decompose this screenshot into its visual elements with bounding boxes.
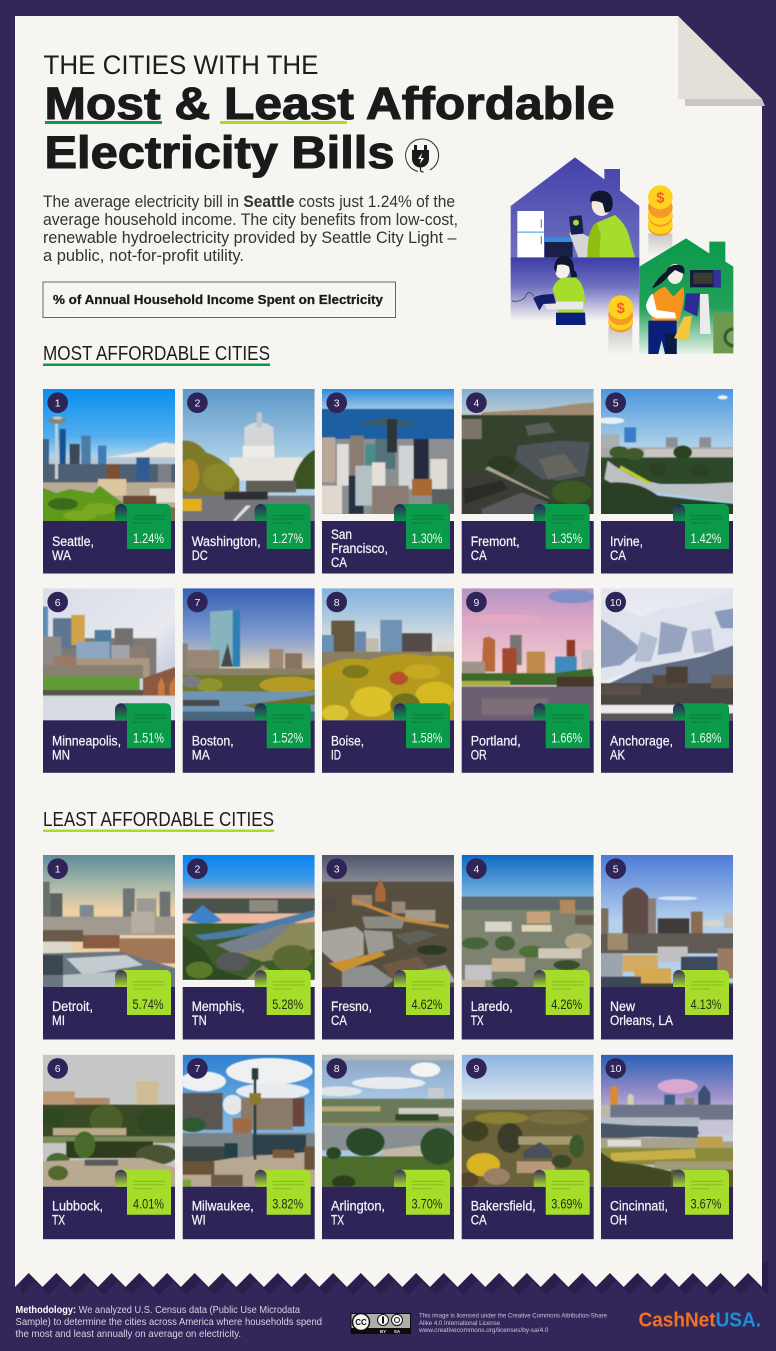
card: Laredo bbox=[460, 855, 595, 1040]
city panel bbox=[43, 987, 175, 1040]
city name: Detroit, bbox=[52, 999, 93, 1014]
methodology note: Sample) to determine the cities across America where households spend bbox=[16, 1316, 322, 1328]
percent tag bbox=[255, 970, 311, 1015]
percent tag bbox=[673, 1170, 729, 1215]
rank badge bbox=[326, 1058, 347, 1079]
rank badge: 8 bbox=[334, 1063, 340, 1075]
city panel bbox=[462, 1187, 594, 1239]
rank badge: 7 bbox=[194, 597, 200, 609]
city name: New bbox=[610, 999, 635, 1014]
paper torn edge shadow bbox=[21, 1262, 768, 1295]
card: Milwaukee bbox=[179, 1055, 316, 1239]
percent tag: 1.58% bbox=[412, 729, 442, 745]
rank badge: 5 bbox=[613, 398, 619, 410]
city name: Orleans, LA bbox=[610, 1013, 673, 1028]
rank badge: 7 bbox=[194, 1063, 200, 1075]
rank badge: 8 bbox=[334, 597, 340, 609]
percent tag: 3.67% bbox=[690, 1196, 722, 1212]
percent tag: 3.82% bbox=[272, 1196, 303, 1212]
title: Most & Least Affordable bbox=[44, 78, 614, 129]
percent tag: 4.01% bbox=[133, 1196, 164, 1212]
card: Fremont bbox=[460, 389, 595, 574]
city name: Irvine, bbox=[610, 534, 643, 549]
percent tag: 1.68% bbox=[690, 729, 722, 745]
photo: Anchorage bbox=[601, 588, 733, 720]
rank badge bbox=[466, 858, 487, 879]
city panel bbox=[462, 521, 594, 574]
illustration: households paying electricity bills: $ bbox=[617, 301, 625, 317]
city panel bbox=[322, 1187, 454, 1239]
photo: Fremont bbox=[462, 389, 594, 514]
city name: Bakersfield, bbox=[471, 1199, 536, 1214]
percent tag bbox=[534, 1170, 590, 1215]
card: Detroit bbox=[41, 855, 176, 1040]
intro text: renewable hydroelectricity provided by Seattle City Light – bbox=[43, 229, 457, 247]
city name: ID bbox=[331, 747, 341, 762]
city name: OH bbox=[610, 1213, 627, 1228]
city name: Memphis, bbox=[192, 999, 245, 1014]
rank badge bbox=[466, 1058, 487, 1079]
creative commons badge bbox=[350, 1313, 411, 1334]
city name: CA bbox=[471, 548, 487, 563]
rank badge: 5 bbox=[613, 864, 619, 876]
rank badge bbox=[47, 858, 68, 879]
card: Arlington bbox=[315, 1053, 457, 1239]
percent tag bbox=[115, 504, 171, 549]
card: Irvine bbox=[598, 389, 734, 574]
rank badge: 1 bbox=[55, 398, 61, 410]
city name: Fremont, bbox=[471, 534, 520, 549]
intro text: The average electricity bill in Seattle costs just 1.24% of the bbox=[43, 193, 455, 211]
city name: TN bbox=[192, 1013, 207, 1028]
rank badge bbox=[605, 592, 626, 612]
card: Anchorage bbox=[599, 588, 734, 773]
intro text: a public, not-for-profit utility. bbox=[43, 247, 244, 265]
card: Memphis bbox=[181, 855, 316, 1040]
card: Fresno bbox=[320, 855, 455, 1040]
photo: Cincinnati bbox=[601, 1054, 733, 1187]
license text bbox=[418, 1314, 608, 1334]
city name: Arlington, bbox=[331, 1199, 385, 1214]
city panel bbox=[43, 1187, 175, 1239]
city panel bbox=[322, 987, 454, 1040]
city name: Milwaukee, bbox=[192, 1199, 254, 1214]
city name: CA bbox=[331, 1013, 347, 1028]
metric label box: % of Annual Household Income Spent on Electricity bbox=[53, 293, 383, 307]
rank badge bbox=[466, 592, 487, 612]
city name: CA bbox=[610, 548, 626, 563]
city name: Minneapolis, bbox=[52, 733, 121, 748]
rank badge: 4 bbox=[473, 398, 479, 410]
card: New Orleans bbox=[599, 855, 734, 1040]
illustration: households paying electricity bills: $ bbox=[656, 191, 664, 207]
license text: This image is licensed under the Creative Commons Attribution-Share bbox=[419, 1314, 608, 1320]
license text: www.creativecommons.org/licenses/by-sa/4.0 bbox=[418, 1328, 549, 1334]
percent tag bbox=[394, 970, 450, 1015]
city panel bbox=[183, 1187, 315, 1239]
percent tag: 1.52% bbox=[272, 729, 303, 745]
city panel bbox=[322, 521, 454, 574]
rank badge: 3 bbox=[334, 864, 340, 876]
photo: Arlington bbox=[322, 1054, 454, 1187]
city name: DC bbox=[192, 548, 208, 563]
illustration: households paying electricity bills bbox=[510, 158, 734, 354]
card: Washington bbox=[179, 389, 316, 574]
percent tag bbox=[394, 1170, 450, 1215]
city name: Cincinnati, bbox=[610, 1199, 668, 1214]
city panel bbox=[322, 720, 454, 773]
city name: MA bbox=[192, 747, 210, 762]
card: Cincinnati bbox=[599, 1055, 734, 1239]
photo: Fresno bbox=[322, 855, 454, 987]
creative commons badge: BY bbox=[380, 1329, 386, 1334]
rank badge bbox=[47, 592, 68, 612]
heading: most affordable cities: MOST AFFORDABLE CITIES bbox=[43, 342, 270, 365]
photo: Boston bbox=[182, 588, 315, 720]
rank badge bbox=[326, 858, 347, 879]
photo: Portland bbox=[462, 588, 594, 720]
percent tag bbox=[534, 703, 590, 748]
city panel bbox=[601, 1187, 733, 1239]
photo: San Francisco bbox=[322, 389, 454, 514]
card: Boston bbox=[181, 588, 319, 773]
rank badge: 2 bbox=[194, 398, 200, 410]
logo: CashNetUSA: CashNetUSA. bbox=[638, 1310, 761, 1332]
percent tag: 4.13% bbox=[690, 996, 722, 1012]
page fold corner bbox=[678, 16, 765, 106]
percent tag: 1.35% bbox=[551, 530, 582, 546]
city name: San bbox=[331, 527, 352, 542]
license text: Alike 4.0 International License bbox=[419, 1321, 501, 1327]
title bbox=[44, 50, 614, 178]
rank badge bbox=[47, 1058, 68, 1079]
city panel bbox=[462, 987, 594, 1040]
city panel bbox=[183, 720, 315, 773]
city name: Fresno, bbox=[331, 999, 372, 1014]
percent tag: 1.51% bbox=[133, 729, 164, 745]
photo: New Orleans bbox=[601, 855, 733, 987]
rank badge: 9 bbox=[473, 1063, 479, 1075]
photo: Detroit bbox=[43, 855, 175, 987]
rank badge bbox=[187, 858, 208, 879]
rank badge: 6 bbox=[55, 597, 61, 609]
photo: Boise bbox=[322, 588, 454, 720]
city name: MN bbox=[52, 747, 70, 762]
city name: Lubbock, bbox=[52, 1199, 103, 1214]
city panel bbox=[183, 987, 315, 1040]
city name: TX bbox=[52, 1213, 65, 1228]
rank badge bbox=[326, 392, 347, 413]
rank badge: 10 bbox=[610, 1063, 622, 1075]
card: San Francisco bbox=[320, 389, 455, 574]
city name: Washington, bbox=[192, 534, 261, 549]
photo: Milwaukee bbox=[182, 1054, 315, 1187]
methodology note: Methodology: We analyzed U.S. Census data (Public Use Microdata bbox=[16, 1304, 300, 1316]
rank badge bbox=[605, 858, 626, 879]
percent tag: 5.74% bbox=[132, 996, 164, 1012]
card: Seattle bbox=[41, 389, 176, 574]
city name: WI bbox=[192, 1213, 206, 1228]
city name: Seattle, bbox=[52, 534, 94, 549]
city name: CA bbox=[331, 555, 347, 570]
city name: Francisco, bbox=[331, 541, 388, 556]
rank badge bbox=[47, 392, 68, 413]
photo: Lubbock bbox=[43, 1054, 175, 1187]
city name: OR bbox=[471, 747, 487, 762]
card: Minneapolis bbox=[41, 588, 176, 773]
city panel bbox=[601, 987, 733, 1040]
rank badge bbox=[187, 392, 208, 413]
city panel bbox=[43, 720, 175, 773]
percent tag: 4.62% bbox=[412, 996, 442, 1012]
percent tag bbox=[394, 703, 450, 748]
percent tag: 1.27% bbox=[272, 530, 303, 546]
rank badge bbox=[466, 392, 487, 413]
percent tag bbox=[534, 970, 590, 1015]
city name: WA bbox=[52, 548, 71, 563]
percent tag bbox=[255, 504, 311, 549]
city panel bbox=[601, 521, 733, 574]
creative commons badge: SA bbox=[394, 1329, 401, 1334]
percent tag bbox=[115, 703, 171, 748]
percent tag bbox=[673, 703, 729, 748]
rank badge: 6 bbox=[55, 1063, 61, 1075]
title: THE CITIES WITH THE bbox=[44, 50, 318, 80]
city name: MI bbox=[52, 1013, 65, 1028]
photo: US Capitol bbox=[182, 389, 315, 521]
percent tag bbox=[534, 504, 590, 549]
rank badge: 9 bbox=[473, 597, 479, 609]
percent tag: 4.26% bbox=[551, 996, 582, 1012]
city panel bbox=[183, 521, 315, 574]
city name: AK bbox=[610, 747, 625, 762]
card: Boise bbox=[320, 588, 455, 773]
percent tag bbox=[394, 504, 450, 549]
city panel bbox=[462, 720, 594, 773]
photo: Seattle skyline bbox=[43, 389, 175, 521]
percent tag: 5.28% bbox=[272, 996, 303, 1012]
photo: Laredo bbox=[462, 855, 594, 987]
rank badge bbox=[326, 592, 347, 612]
title: Electricity Bills bbox=[44, 127, 394, 178]
card: Portland bbox=[460, 588, 595, 773]
photo: Bakersfield bbox=[462, 1054, 594, 1187]
percent tag: 3.70% bbox=[412, 1196, 442, 1212]
percent tag bbox=[673, 970, 729, 1015]
percent tag: 1.30% bbox=[412, 530, 442, 546]
rank badge bbox=[187, 1058, 208, 1079]
percent tag: 1.42% bbox=[690, 530, 722, 546]
metric label box bbox=[43, 282, 396, 318]
percent tag bbox=[115, 970, 171, 1015]
city name: Portland, bbox=[471, 733, 521, 748]
rank badge bbox=[605, 392, 626, 413]
photo: Memphis bbox=[182, 855, 315, 980]
rank badge: 2 bbox=[194, 864, 200, 876]
percent tag bbox=[255, 1170, 311, 1215]
intro text: average household income. The city benefits from low-cost, bbox=[43, 211, 458, 229]
percent tag bbox=[115, 1170, 171, 1215]
percent tag: 1.24% bbox=[133, 530, 164, 546]
card: Bakersfield bbox=[458, 1055, 595, 1239]
photo: Minneapolis bbox=[43, 588, 175, 720]
rank badge: 10 bbox=[610, 597, 622, 609]
creative commons badge: CC bbox=[355, 1318, 367, 1327]
city name: TX bbox=[331, 1213, 344, 1228]
rank badge bbox=[605, 1058, 626, 1079]
percent tag bbox=[673, 504, 729, 549]
percent tag: 3.69% bbox=[551, 1196, 582, 1212]
heading: least affordable cities: LEAST AFFORDABLE CITIES bbox=[43, 808, 274, 831]
photo: Irvine bbox=[601, 389, 733, 514]
city name: Boston, bbox=[192, 733, 234, 748]
city panel bbox=[601, 720, 733, 773]
city name: Boise, bbox=[331, 733, 364, 748]
icon: plug bbox=[406, 139, 439, 172]
percent tag: 1.66% bbox=[551, 729, 582, 745]
methodology note bbox=[16, 1304, 322, 1340]
city name: Laredo, bbox=[471, 999, 513, 1014]
city panel bbox=[43, 521, 175, 574]
rank badge: 3 bbox=[334, 398, 340, 410]
percent tag bbox=[255, 703, 311, 748]
city name: Anchorage, bbox=[610, 733, 673, 748]
intro text bbox=[43, 193, 458, 265]
rank badge: 4 bbox=[473, 864, 479, 876]
rank badge bbox=[187, 592, 208, 612]
methodology note: the most and least annually on average on electricity. bbox=[16, 1328, 241, 1340]
city name: CA bbox=[471, 1213, 487, 1228]
rank badge: 1 bbox=[55, 864, 61, 876]
card: Lubbock bbox=[41, 1055, 177, 1239]
city name: TX bbox=[471, 1013, 484, 1028]
